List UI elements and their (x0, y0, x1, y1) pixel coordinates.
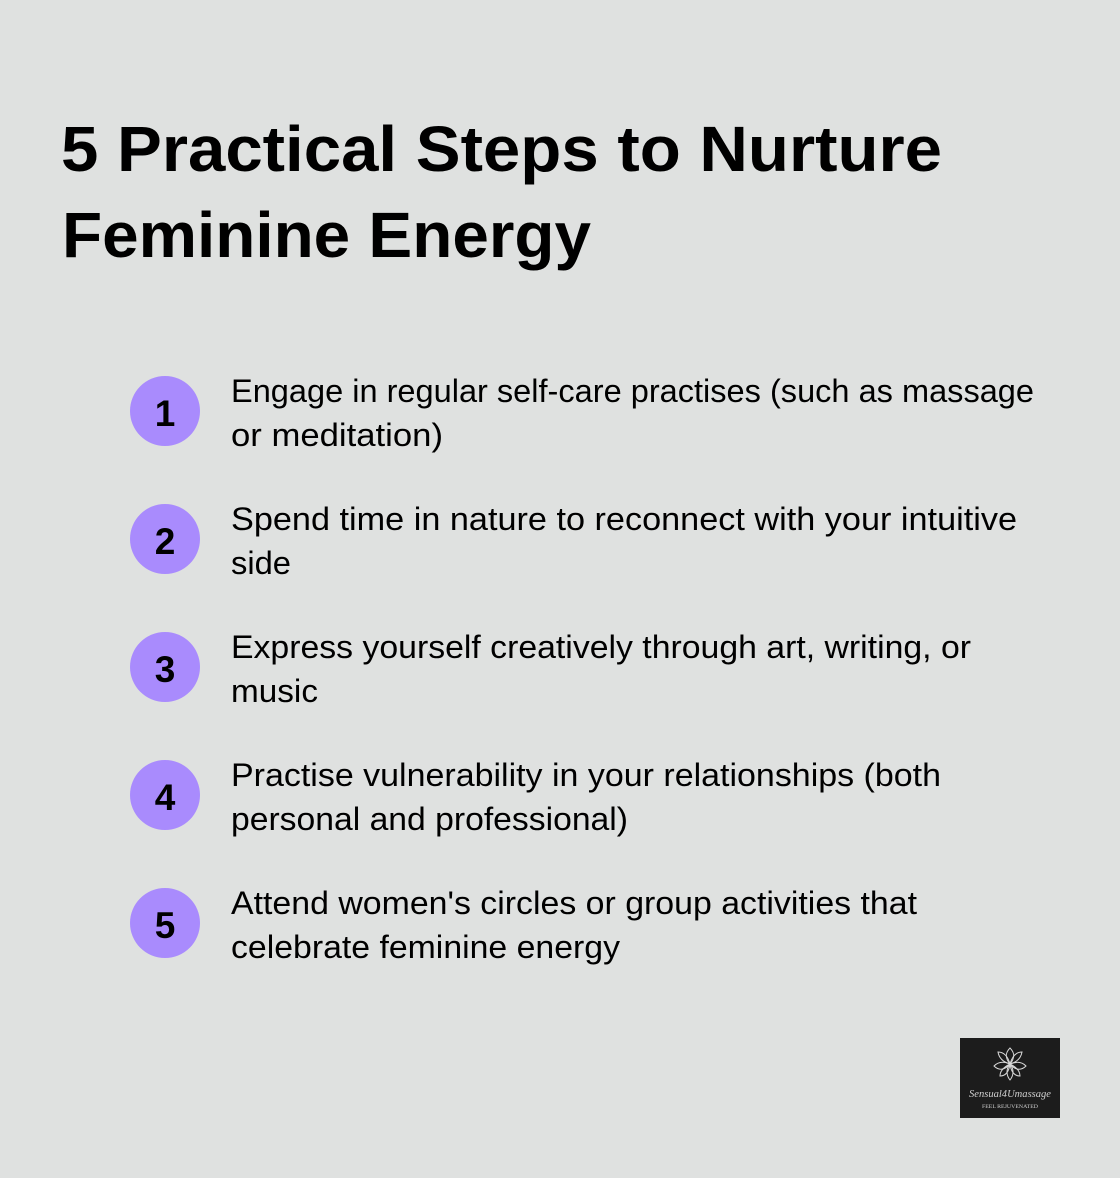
step 2 text: Spend time in nature to reconnect with your intuitive (231, 501, 1017, 537)
title: Feminine Energy (62, 199, 591, 271)
step 5 text (231, 885, 917, 965)
step 5 badge (130, 888, 200, 958)
step 4 text: personal and professional) (231, 801, 628, 837)
step 4 text: Practise vulnerability in your relationships (both (231, 757, 941, 793)
step 2 text (231, 501, 1017, 581)
step 3 badge: 3 (155, 649, 175, 690)
icon: lotus flower (994, 1048, 1026, 1080)
step 4 badge (130, 760, 200, 830)
step 2 badge (130, 504, 200, 574)
step 3 text: music (231, 673, 318, 709)
step 2 badge: 2 (155, 521, 175, 562)
step 1 text: or meditation) (231, 417, 443, 453)
logo tagline: FEEL REJUVENATED (982, 1104, 1038, 1110)
step 3 (130, 629, 971, 709)
title: 5 Practical Steps to Nurture (61, 113, 942, 185)
step 3 text: Express yourself creatively through art, writing, or (231, 629, 971, 665)
step 3 text (231, 629, 971, 709)
step 1 (130, 373, 1034, 453)
step 4 (130, 757, 941, 837)
step 5 (130, 885, 917, 965)
step 1 text (231, 373, 1034, 453)
step 5 text: Attend women's circles or group activities that (231, 885, 917, 921)
step 1 text: Engage in regular self-care practises (such as massage (231, 373, 1034, 409)
step 4 badge: 4 (155, 777, 176, 818)
logo (960, 1038, 1060, 1118)
step 1 badge: 1 (155, 393, 175, 434)
step 2 text: side (231, 545, 291, 581)
step 5 badge: 5 (155, 905, 175, 946)
step 1 badge (130, 376, 200, 446)
title (61, 113, 942, 271)
step 3 badge (130, 632, 200, 702)
logo wordmark: Sensual4Umassage (969, 1088, 1051, 1100)
step 2 (130, 501, 1017, 581)
step 5 text: celebrate feminine energy (231, 929, 621, 965)
step 4 text (231, 757, 941, 837)
